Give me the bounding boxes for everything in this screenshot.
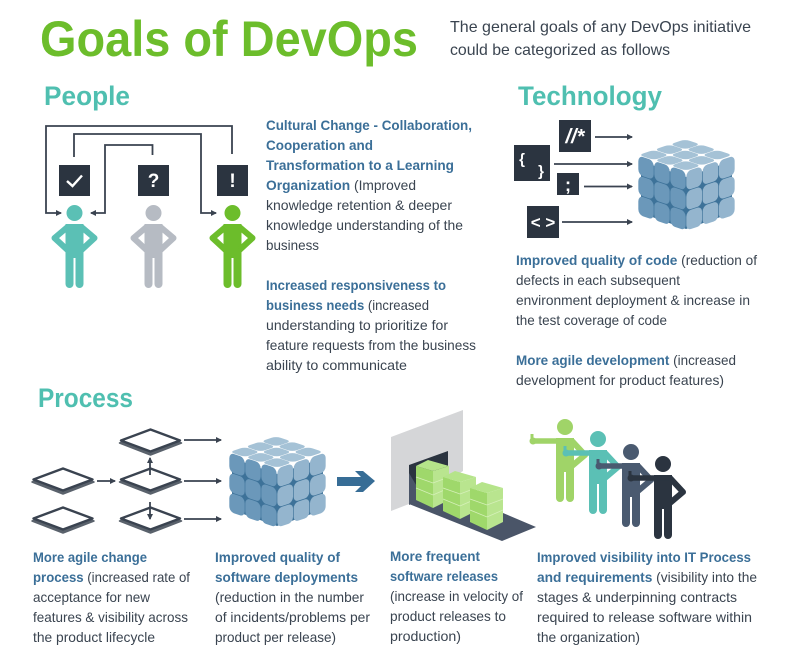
icon: braces box: { [519, 151, 525, 168]
text block: people goals: understanding to prioritize for [266, 317, 448, 333]
text block: people goals: ability to communicate [266, 357, 407, 373]
text block: software deployments: (reduction in the number [215, 589, 364, 605]
text block: people goals: feature requests from the business [266, 337, 476, 353]
icon: angle brackets box [527, 206, 559, 238]
title: Goals of DevOps [40, 11, 418, 67]
arrows to cube [554, 137, 632, 222]
icon: semicolon box [557, 173, 579, 195]
text block: software deployments [215, 549, 370, 645]
text block: software deployments: of incidents/problems per [215, 609, 370, 625]
text block: software releases [390, 548, 523, 644]
icon: question box [138, 165, 169, 196]
text block: people goals: business [266, 237, 319, 253]
text block: IT visibility: the organization) [537, 629, 640, 645]
text block: technology goals: development for product features) [516, 372, 724, 388]
text block: software releases: (increase in velocity of [390, 588, 523, 604]
text block: people goals: Increased responsiveness to [266, 277, 446, 293]
text block: IT visibility: Improved visibility into IT Process [537, 549, 751, 565]
text block: technology goals: environment deployment & increase in [516, 292, 750, 308]
icon: exclamation box: ! [229, 171, 236, 192]
text block: technology goals [516, 252, 757, 388]
text block: software releases: software releases [390, 568, 498, 584]
text block: software releases: production) [390, 628, 461, 644]
cube [229, 436, 326, 527]
cube [638, 139, 735, 230]
heading: Process: Process [38, 383, 133, 413]
text block: software deployments: product per release) [215, 629, 336, 645]
text block: people goals [266, 117, 476, 373]
text block: technology goals: defects in each subsequent [516, 272, 680, 288]
text block: people goals: knowledge understanding of the [266, 217, 463, 233]
process flow diagram [32, 430, 375, 533]
green person [212, 205, 252, 288]
text block: agile change process: More agile change [33, 549, 147, 565]
teal person [54, 205, 94, 288]
text block: IT visibility: and requirements (visibility into the [537, 569, 757, 585]
technology code-to-cube diagram [514, 120, 735, 238]
icon: comment box: //* [565, 126, 586, 148]
intro text: could be categorized as follows [450, 42, 670, 59]
people feedback diagram [46, 126, 252, 288]
text block: agile change process [33, 549, 190, 645]
text block: IT visibility: required to release software within [537, 609, 752, 625]
text block: agile change process: features & visibility across [33, 609, 188, 625]
text block: people goals: Cultural Change - Collaboration, [266, 117, 472, 133]
pointing people [530, 419, 683, 539]
text block: IT visibility [537, 549, 757, 645]
text block: agile change process: the product lifecycle [33, 629, 155, 645]
text block: people goals: knowledge retention & deeper [266, 197, 452, 213]
release door illustration [391, 410, 536, 541]
intro text: The general goals of any DevOps initiative [450, 19, 751, 36]
icon: braces box [514, 145, 550, 181]
icon: question box: ? [148, 171, 159, 192]
wall [391, 410, 463, 511]
text block: IT visibility: stages & underpinning contracts [537, 589, 737, 605]
big arrow [337, 471, 375, 492]
floor [409, 473, 536, 541]
heading: People: People [44, 81, 130, 111]
intro text [450, 19, 751, 59]
text block: software deployments: Improved quality of [215, 549, 340, 565]
text block: software releases: More frequent [390, 548, 480, 564]
icon: braces box: } [538, 163, 544, 180]
text block: people goals: business needs (increased [266, 297, 429, 313]
text block: agile change process: process (increased rate of [33, 569, 190, 585]
text block: people goals: Cooperation and [266, 137, 373, 153]
text block: people goals: Transformation to a Learning [266, 157, 454, 173]
icon: check box [59, 165, 90, 196]
text block: technology goals: Improved quality of code (reduction of [516, 252, 757, 268]
workflow stages [32, 430, 182, 533]
grey person [134, 205, 174, 288]
feedback arrows [46, 126, 232, 213]
workflow arrows [97, 440, 221, 519]
package stacks [416, 460, 503, 530]
text block: agile change process: acceptance for new [33, 589, 151, 605]
text block: people goals: Organization (Improved [266, 177, 416, 193]
text block: technology goals: the test coverage of code [516, 312, 667, 328]
text block: technology goals: More agile development (increased [516, 352, 736, 368]
text block: software releases: product releases to [390, 608, 506, 624]
icon: comment box [559, 120, 591, 152]
icon: angle brackets box: < > [531, 213, 555, 232]
door opening [409, 451, 448, 505]
text block: software deployments: software deployments [215, 569, 358, 585]
heading: Technology: Technology [518, 81, 662, 111]
icon: semicolon box: ; [565, 175, 571, 195]
icon: exclamation box [217, 165, 248, 196]
